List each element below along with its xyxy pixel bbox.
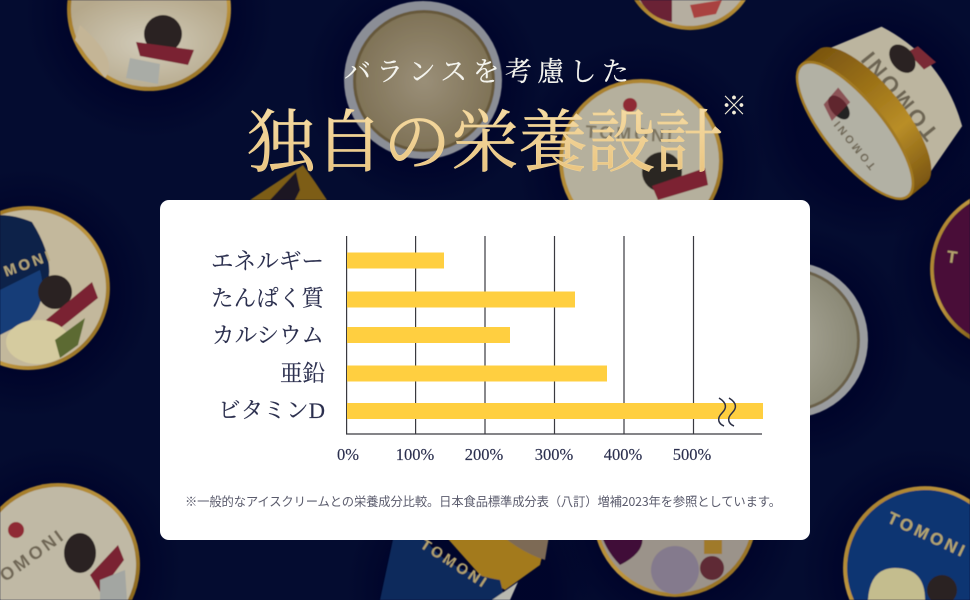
axis labels: 300%	[535, 445, 574, 464]
bar: zinc	[347, 366, 607, 382]
cup: side view with gold band	[777, 0, 970, 217]
category labels: ビタミンD	[218, 398, 325, 423]
cup: vanilla left	[0, 206, 110, 370]
bar: protein	[347, 292, 575, 308]
cup: blue side bottom	[380, 530, 550, 600]
axis labels: 500%	[673, 445, 712, 464]
cup: side view with gold band: TOMONI	[854, 44, 943, 146]
bar chart	[346, 236, 763, 434]
cup: open lid white	[344, 1, 502, 159]
category labels: エネルギー	[211, 249, 324, 274]
cup: red bean top	[634, 0, 746, 30]
cup: soy milk center	[559, 79, 723, 243]
category labels	[211, 249, 325, 423]
cup: vanilla left: MONI	[2, 247, 55, 281]
axis labels	[337, 445, 712, 464]
cup: blue bottom right	[843, 486, 970, 600]
cup: blue bottom right: TOMONI	[884, 508, 970, 562]
cup: sliver behind card	[250, 165, 327, 200]
main title: 独自の栄養設計	[247, 105, 723, 181]
reference mark: ※	[721, 92, 747, 121]
category labels: カルシウム	[212, 323, 324, 348]
grid lines	[346, 236, 762, 434]
cup: purple right	[930, 199, 970, 339]
cup: side view with gold band: TOMONI	[830, 116, 878, 172]
bar: vitamin D	[347, 403, 763, 419]
cup: purple bottom	[593, 433, 757, 597]
bar: calcium	[347, 327, 510, 343]
cup: soy milk bottom left	[0, 483, 140, 600]
footnote: ※一般的なアイスクリームとの栄養成分比較。日本食品標準成分表（八訂）増補2023年を参照としています。	[185, 492, 781, 510]
axis labels: 100%	[396, 445, 434, 464]
cup: blue side bottom: TOMONI	[417, 536, 492, 593]
cup: purple right: T	[945, 247, 961, 268]
cup: soy milk center: TOMONI	[585, 122, 676, 146]
axis labels: 0%	[337, 445, 359, 464]
bar: energy	[347, 252, 444, 268]
axis labels: 400%	[604, 445, 642, 464]
category labels: たんぱく質	[211, 286, 325, 311]
axis labels: 200%	[465, 445, 504, 464]
panel: chart card	[160, 200, 810, 540]
category labels: 亜鉛	[280, 361, 325, 386]
subtitle: バランスを考慮した	[344, 57, 629, 87]
cup: open lid behind card	[712, 262, 868, 418]
cup: soy milk top left	[67, 0, 231, 91]
icon: axis break squiggle	[719, 398, 735, 426]
